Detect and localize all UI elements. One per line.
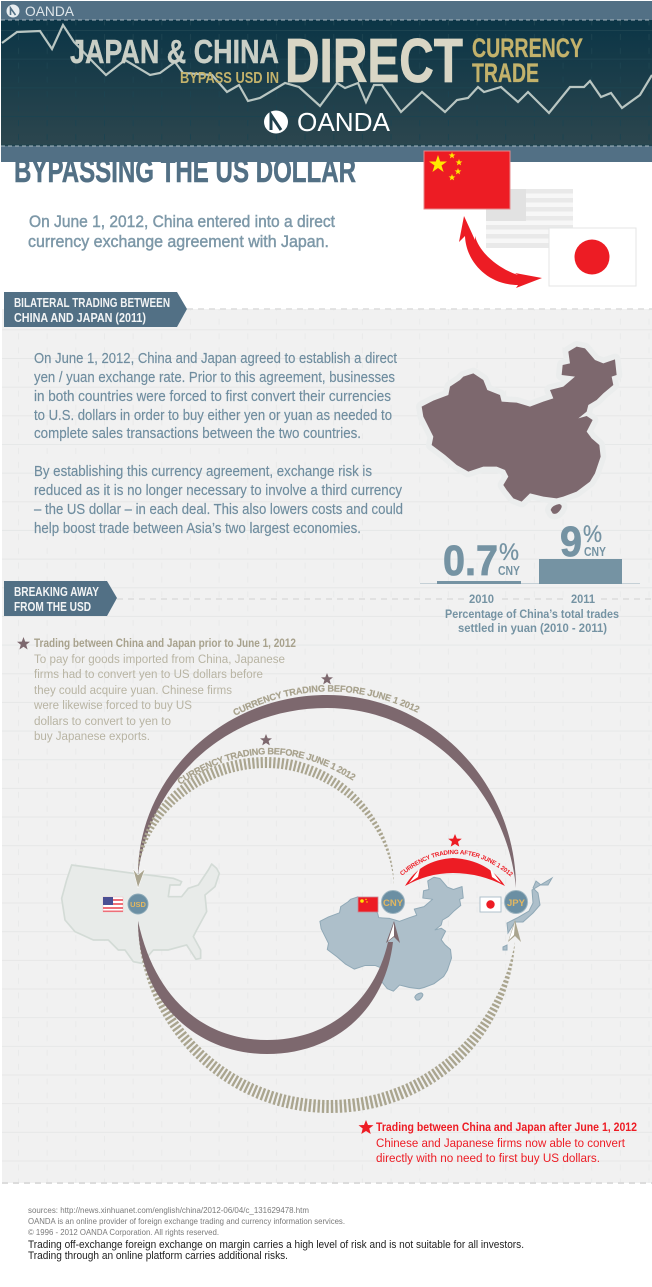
icon: US flag bbox=[103, 897, 123, 912]
map: USA bbox=[62, 864, 219, 963]
section heading: bypassing the US dollar: BYPASSING THE US DOLLAR bbox=[14, 152, 356, 189]
bar chart: yuan settlement share: % bbox=[499, 539, 519, 566]
icon: China flag small bbox=[358, 897, 378, 912]
callout: before June 1 2012: buy Japanese exports. bbox=[34, 729, 150, 743]
header banner bbox=[1, 1, 652, 162]
node: JPY with flag bbox=[480, 890, 528, 914]
bar chart: yuan settlement share: 9 bbox=[560, 518, 582, 566]
callout: before June 1 2012: firms had to convert yen to US dollars before bbox=[34, 667, 263, 681]
map: China small bbox=[320, 877, 463, 1000]
flag: China bbox=[424, 151, 510, 209]
ribbon: bilateral trading: BILATERAL TRADING BETWEEN bbox=[14, 296, 170, 310]
bar 2010 bbox=[437, 581, 521, 584]
arrow: into JPY bbox=[508, 920, 521, 942]
callout: before June 1 2012: were likewise forced to buy US bbox=[33, 698, 192, 712]
bar chart: yuan settlement share: Percentage of China’s total trades bbox=[445, 607, 619, 621]
icon: Japan flag small bbox=[480, 897, 501, 912]
line chart bbox=[2, 25, 652, 113]
footer: risk disclaimer bbox=[28, 1239, 524, 1262]
bar chart: yuan settlement share: 2011 bbox=[571, 592, 595, 606]
arc: brown, USD to JPY, before June 2012 bbox=[138, 695, 516, 888]
arc: dashed, USD to JPY, lower bbox=[138, 921, 515, 1113]
title: trade: TRADE bbox=[472, 58, 539, 88]
title: japan and china: JAPAN & CHINA bbox=[70, 33, 279, 70]
arc label: after June 2012: CURRENCY TRADING AFTER JUNE 1 2012 bbox=[400, 850, 513, 876]
flag: USA faded bbox=[486, 189, 573, 248]
bar chart: yuan settlement share: 2010 bbox=[469, 592, 494, 606]
callout: before June 1 2012 bbox=[17, 636, 296, 743]
text block: agreement description: in both countries were forced to first convert their currencies bbox=[34, 389, 391, 405]
footer: risk disclaimer: Trading through an online platform carries additional risks. bbox=[28, 1250, 288, 1262]
ribbon: bilateral trading: CHINA AND JAPAN (2011) bbox=[14, 311, 146, 325]
footer: sources and copyright bbox=[28, 1205, 345, 1237]
title: currency: CURRENCY bbox=[472, 33, 583, 63]
text block: agreement description: to U.S. dollars in order to buy either yen or yuan as needed to bbox=[34, 408, 392, 424]
centre logo: OANDA bbox=[297, 107, 391, 137]
arrow: into CNY bbox=[386, 921, 400, 943]
text block: agreement description: By establishing this currency agreement, exchange risk is bbox=[34, 464, 372, 480]
arrow: into USD bbox=[133, 869, 145, 888]
icon: star bbox=[358, 1120, 374, 1134]
footer: risk disclaimer: Trading off-exchange foreign exchange on margin carries a high level of risk and is not suitable for all investors. bbox=[28, 1239, 524, 1251]
bar chart: yuan settlement share: % bbox=[583, 521, 602, 548]
arc label: upper brown: CURRENCY TRADING BEFORE JUNE 1 2012 bbox=[233, 685, 420, 715]
arc: dashed, USD to CNY, before June 2012 bbox=[138, 757, 394, 886]
map: Japan bbox=[503, 878, 552, 950]
node: USD with flag bbox=[103, 894, 148, 914]
icon: red star bbox=[448, 834, 462, 847]
title: direct: DIRECT bbox=[285, 27, 463, 96]
text block: agreement description: yen / yuan exchange rate. Prior to this agreement, businesses bbox=[34, 370, 395, 386]
ribbon: breaking away: FROM THE USD bbox=[14, 600, 91, 614]
node: CNY with flag: CNY bbox=[383, 898, 404, 909]
icon: star above dashed arc bbox=[260, 734, 272, 745]
intro text: On June 1, 2012, China entered into a direct bbox=[29, 212, 335, 231]
footer: sources and copyright: © 1996 - 2012 OANDA Corporation. All rights reserved. bbox=[28, 1227, 219, 1237]
title: bypass usd in: BYPASS USD IN bbox=[180, 70, 279, 87]
node: JPY with flag: JPY bbox=[507, 898, 526, 909]
text block: agreement description: reduced as it is no longer necessary to involve a third currency bbox=[34, 483, 403, 499]
ribbon: breaking away bbox=[4, 581, 117, 616]
arrow: red curved bbox=[459, 216, 542, 288]
node: CNY with flag bbox=[358, 890, 404, 914]
arc label: dashed: CURRENCY TRADING BEFORE JUNE 1 2012 bbox=[178, 748, 356, 784]
arc: brown, USD to CNY, lower bbox=[138, 921, 393, 1054]
map: China large bbox=[422, 347, 617, 514]
arrow: red direct trade arc bbox=[405, 858, 505, 886]
text block: agreement description: complete sales transactions between the two countries. bbox=[34, 426, 361, 442]
icon: star bbox=[17, 637, 30, 650]
ribbon: breaking away: BREAKING AWAY bbox=[14, 585, 100, 599]
callout: before June 1 2012: they could acquire yuan. Chinese firms bbox=[34, 683, 232, 697]
callout: after June 1 2012 bbox=[358, 1120, 637, 1165]
footer: sources and copyright: sources: http://news.xinhuanet.com/english/china/2012-06/04/c_131629478.htm bbox=[28, 1205, 309, 1215]
top logo: OANDA bbox=[25, 3, 75, 19]
callout: before June 1 2012: dollars to convert to yen to bbox=[34, 714, 171, 728]
bar chart: yuan settlement share: 0.7 bbox=[443, 537, 498, 585]
ribbon: bilateral trading bbox=[4, 292, 187, 327]
intro text: currency exchange agreement with Japan. bbox=[28, 232, 329, 251]
intro text bbox=[28, 212, 335, 251]
callout: before June 1 2012: To pay for goods imported from China, Japanese bbox=[34, 652, 285, 666]
node: USD with flag: USD bbox=[130, 900, 146, 909]
bar chart: yuan settlement share: settled in yuan (2010 - 2011) bbox=[458, 621, 607, 635]
bar chart: yuan settlement share bbox=[420, 518, 640, 635]
bar chart: yuan settlement share: CNY bbox=[584, 544, 606, 559]
callout: after June 1 2012: directly with no need to first buy US dollars. bbox=[376, 1151, 600, 1165]
callout: after June 1 2012: Chinese and Japanese firms now able to convert bbox=[376, 1136, 626, 1150]
content panel background bbox=[2, 309, 652, 1183]
callout: before June 1 2012: Trading between China and Japan prior to June 1, 2012 bbox=[34, 636, 296, 650]
text block: agreement description bbox=[34, 351, 403, 537]
text block: agreement description: help boost trade between Asia’s two largest economies. bbox=[34, 521, 361, 537]
icon: star above brown arc bbox=[321, 673, 333, 684]
flag: Japan bbox=[549, 228, 636, 286]
bar 2011 bbox=[539, 559, 622, 584]
bar chart: yuan settlement share: CNY bbox=[498, 563, 520, 578]
text block: agreement description: – the US dollar – in each deal. This also lowers costs and could bbox=[34, 502, 403, 518]
footer: sources and copyright: OANDA is an online provider of foreign exchange trading and currency information services. bbox=[28, 1216, 345, 1226]
text block: agreement description: On June 1, 2012, China and Japan agreed to establish a direct bbox=[34, 351, 397, 367]
